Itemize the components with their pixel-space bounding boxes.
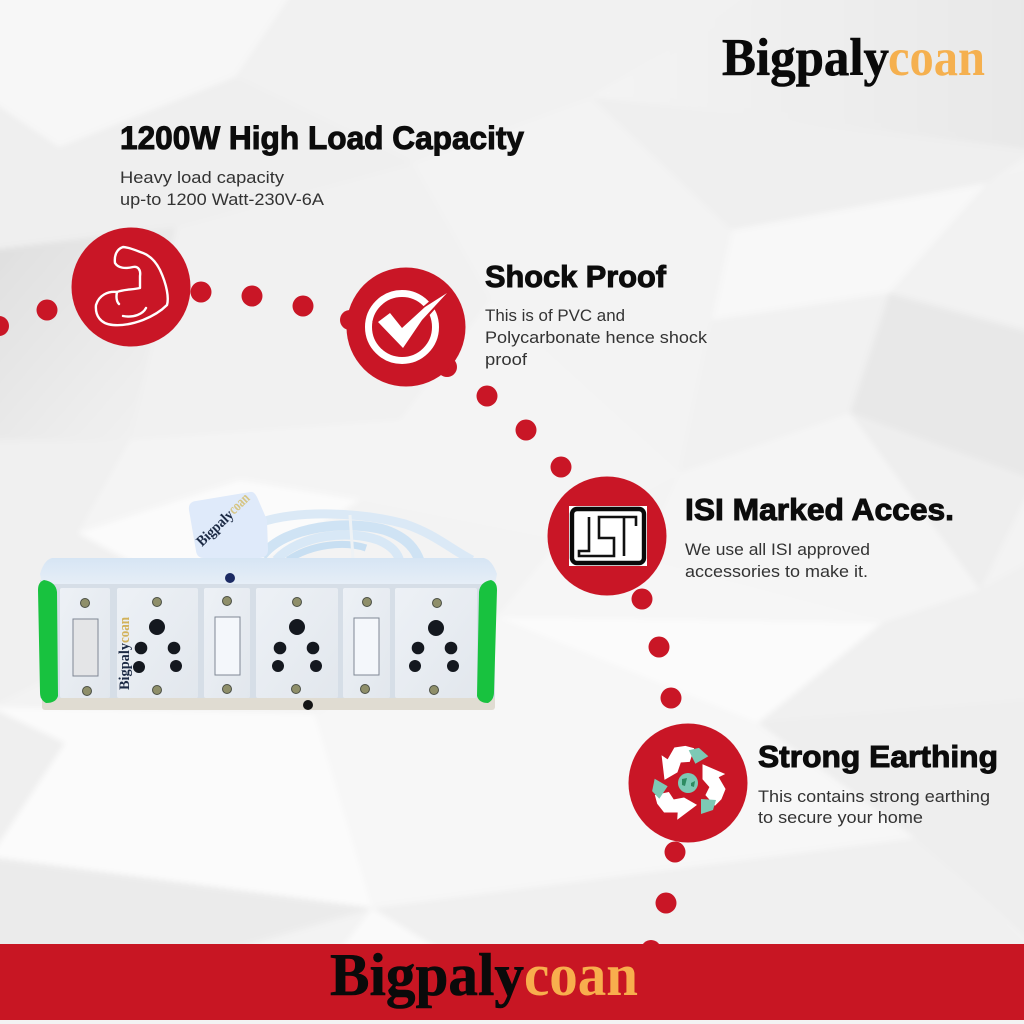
base and lid bbox=[42, 690, 495, 710]
text: load capacity description: up-to 1200 Watt-230V-6A bbox=[120, 191, 324, 209]
text: shock proof description: proof bbox=[485, 351, 527, 369]
plug bbox=[189, 490, 268, 558]
indicators bbox=[225, 573, 235, 583]
bottom brand band: Bigpaly bbox=[330, 942, 524, 1008]
cable coil bbox=[262, 514, 472, 562]
plug: Bigpaly bbox=[194, 507, 237, 550]
heading: Shock Proof: Shock Proof bbox=[485, 259, 667, 294]
dotted path bbox=[0, 282, 686, 960]
icon: ISI mark bbox=[548, 476, 666, 596]
text: earthing description: to secure your home bbox=[758, 809, 923, 827]
board logo: Bigpaly bbox=[117, 643, 133, 690]
green end caps bbox=[38, 580, 497, 703]
text: ISI description bbox=[685, 541, 870, 581]
text: load capacity description: Heavy load capacity bbox=[120, 169, 285, 187]
heading: Strong Earthing: Strong Earthing bbox=[758, 739, 998, 774]
text: earthing description: This contains strong earthing bbox=[758, 788, 990, 806]
text: earthing description bbox=[758, 788, 990, 827]
board logo: coan bbox=[117, 616, 133, 643]
socket holes bbox=[133, 619, 459, 673]
icon: recycling earth bbox=[628, 724, 748, 842]
switches bbox=[73, 617, 379, 676]
text: shock proof description: Polycarbonate hence shock bbox=[485, 329, 708, 347]
text: shock proof description: This is of PVC and bbox=[485, 307, 625, 325]
icon: flexed arm bbox=[72, 228, 190, 346]
screws bbox=[80, 596, 442, 696]
feature: shock proof bbox=[346, 259, 708, 386]
top logo bbox=[722, 29, 985, 87]
feature: high load capacity bbox=[72, 120, 524, 346]
top logo: coan bbox=[888, 29, 985, 87]
bottom brand band: coan bbox=[524, 942, 638, 1008]
plug: coan bbox=[226, 490, 254, 518]
text: load capacity description bbox=[120, 169, 324, 209]
icon: check mark bbox=[346, 268, 466, 386]
text: ISI description: We use all ISI approved bbox=[685, 541, 870, 559]
bottom brand band bbox=[0, 942, 1024, 1020]
text: ISI description: accessories to make it. bbox=[685, 563, 868, 581]
board logo bbox=[117, 616, 133, 690]
feature: ISI marked bbox=[548, 476, 954, 596]
heading: ISI Marked Acces.: ISI Marked Acces. bbox=[685, 492, 954, 527]
face plates bbox=[60, 588, 477, 698]
feature: strong earthing bbox=[628, 724, 998, 842]
text: shock proof description bbox=[485, 307, 708, 369]
heading: 1200W High Load Capacity: 1200W High Load Capacity bbox=[120, 120, 524, 156]
product: extension board bbox=[38, 490, 497, 710]
top logo: Bigpaly bbox=[722, 29, 889, 87]
